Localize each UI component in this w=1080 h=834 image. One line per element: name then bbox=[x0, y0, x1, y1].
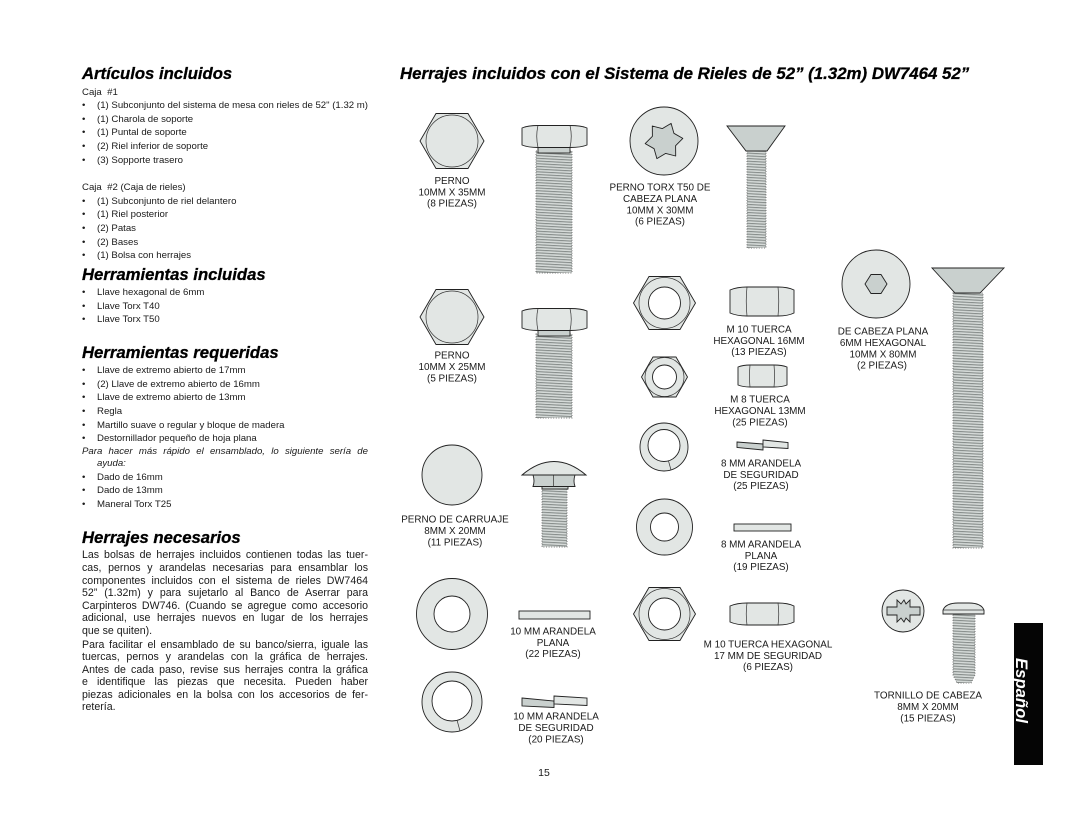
list: cajas: (2) Riel inferior de soporte bbox=[97, 141, 208, 152]
label: 10 MM ARANDELA bbox=[510, 626, 596, 638]
flat head hex socket bolt bbox=[838, 250, 1004, 548]
label: (6 PIEZAS) bbox=[635, 217, 685, 228]
heading: herramientas incluidas: Herramientas incluidas bbox=[82, 265, 266, 284]
nut m10 16mm bbox=[634, 276, 805, 358]
carriage bolt bbox=[401, 445, 586, 548]
flat washer 8mm bbox=[636, 499, 801, 573]
icon: torx head front bbox=[630, 107, 698, 175]
heading: herrajes necesarios: Herrajes necesarios bbox=[82, 528, 241, 547]
panel: artículos incluidos bbox=[81, 64, 368, 261]
label: PERNO bbox=[434, 176, 470, 187]
icon: bolt side bbox=[522, 308, 587, 418]
paragraph 2: Para facilitar el ensamblado de su banco/sierra, iguale las bbox=[82, 638, 368, 650]
panel: herrajes necesarios bbox=[82, 528, 368, 713]
label: DE CABEZA PLANA bbox=[838, 326, 929, 338]
icon: flat washer front bbox=[636, 499, 692, 555]
list: cajas: (1) Subconjunto del sistema de mesa con rieles de 52" (1.32 m) bbox=[97, 100, 368, 111]
paragraph 2: e identifique las piezas que necesita. Pueden haber bbox=[82, 676, 368, 688]
label: (15 PIEZAS) bbox=[900, 714, 956, 724]
paragraph 1: 52” (1.32m) y para sujetarlo al Banco de Aserrar para bbox=[82, 587, 368, 599]
label: PERNO bbox=[434, 350, 470, 362]
list: cajas: (1) Subconjunto de riel delantero bbox=[97, 196, 236, 207]
label: PERNO DE CARRUAJE bbox=[401, 514, 509, 526]
label: (6 PIEZAS) bbox=[743, 662, 793, 673]
icon: hex head front bbox=[420, 290, 484, 344]
icon: lock washer front bbox=[422, 672, 482, 732]
list: cajas: (2) Patas bbox=[97, 223, 136, 234]
label: CABEZA PLANA bbox=[623, 194, 697, 205]
icon: nut side bbox=[738, 365, 787, 387]
label: PLANA bbox=[537, 638, 570, 649]
nut m8 13mm bbox=[642, 357, 806, 428]
label: M 10 TUERCA HEXAGONAL bbox=[704, 640, 833, 650]
note: ensamblado más rápido: ayuda: bbox=[97, 458, 126, 469]
icon: hex socket front bbox=[842, 250, 910, 318]
icon: nut front bbox=[642, 357, 688, 397]
paragraph 1: Las bolsas de herrajes incluidos contienen todas las tuer- bbox=[82, 549, 368, 561]
label: 8MM X 20MM bbox=[897, 702, 959, 713]
icon: flat washer side bbox=[734, 524, 791, 531]
bolt 10mm x 35mm bbox=[419, 114, 587, 273]
icon: bolt side bbox=[522, 126, 587, 273]
panel: herramientas requeridas bbox=[82, 343, 368, 510]
label: 10MM X 30MM bbox=[627, 205, 693, 216]
label: 8 MM ARANDELA bbox=[721, 540, 801, 550]
list: herramientas requeridas: Martillo suave o regular y bloque de madera bbox=[97, 420, 284, 431]
list: cajas: (2) Bases bbox=[97, 237, 138, 248]
list: herramientas requeridas: Llave de extremo abierto de 13mm bbox=[97, 392, 246, 403]
tab label: Español bbox=[1012, 658, 1031, 723]
list: cajas: Caja #2 (Caja de rieles) bbox=[82, 182, 186, 193]
list: cajas bbox=[82, 86, 368, 261]
label: (13 PIEZAS) bbox=[731, 347, 787, 358]
panel: herramientas incluidas bbox=[82, 265, 266, 325]
label: DE SEGURIDAD bbox=[518, 723, 594, 734]
list: herramientas incluidas bbox=[82, 287, 204, 325]
list: dados: Dado de 13mm bbox=[97, 485, 163, 496]
label: (25 PIEZAS) bbox=[733, 481, 789, 492]
label: 17 MM DE SEGURIDAD bbox=[714, 651, 822, 662]
icon: carriage bolt side bbox=[522, 462, 586, 547]
icon: hex head front bbox=[420, 114, 484, 168]
label: 10MM X 25MM bbox=[419, 362, 485, 373]
label: 6MM HEXAGONAL bbox=[840, 338, 927, 349]
label: M 8 TUERCA bbox=[730, 394, 790, 406]
paragraph 1: adicional, use herrajes nuevos en lugar de los herrajes bbox=[82, 612, 368, 624]
label: TORNILLO DE CABEZA bbox=[874, 690, 982, 702]
list: cajas: (3) Sopporte trasero bbox=[97, 155, 183, 166]
list: herramientas requeridas: Destornillador pequeño de hoja plana bbox=[97, 433, 257, 444]
list: herramientas incluidas: Llave Torx T40 bbox=[97, 301, 160, 312]
paragraph 1 bbox=[82, 549, 368, 637]
list: cajas: (1) Puntal de soporte bbox=[97, 127, 187, 138]
label: HEXAGONAL 16MM bbox=[713, 336, 805, 347]
paragraph 2 bbox=[82, 638, 368, 713]
icon: round head front bbox=[422, 445, 482, 505]
icon: flat head side bbox=[932, 268, 1004, 548]
icon: screw side bbox=[943, 603, 984, 683]
icon: flat washer side bbox=[519, 611, 590, 619]
icon: nut front bbox=[634, 588, 696, 640]
note: ensamblado más rápido bbox=[82, 446, 368, 469]
label: (2 PIEZAS) bbox=[857, 361, 907, 372]
paragraph 2: retería. bbox=[82, 701, 116, 713]
label: 10 MM ARANDELA bbox=[513, 712, 599, 722]
list: dados bbox=[82, 472, 172, 510]
page number: 15 bbox=[538, 767, 550, 779]
label: (20 PIEZAS) bbox=[528, 734, 584, 745]
list: herramientas requeridas: Regla bbox=[97, 406, 122, 417]
label: PERNO TORX T50 DE bbox=[610, 182, 711, 194]
label: 10MM X 80MM bbox=[850, 349, 916, 360]
icon: flat washer front bbox=[416, 578, 488, 650]
icon: screw head front bbox=[882, 590, 924, 632]
paragraph 2: tuercas, pernos y arandelas con la gráfica de herrajes. bbox=[82, 651, 368, 663]
paragraph 2: piezas adicionales en la bolsa con los accesorios de fer- bbox=[82, 689, 368, 701]
label: (25 PIEZAS) bbox=[732, 418, 788, 428]
label: DE SEGURIDAD bbox=[723, 470, 799, 481]
label: (11 PIEZAS) bbox=[428, 538, 482, 548]
list: herramientas requeridas: Llave de extremo abierto de 17mm bbox=[97, 365, 246, 376]
torx flat head bolt bbox=[610, 107, 785, 248]
label: (8 PIEZAS) bbox=[427, 199, 477, 210]
label: HEXAGONAL 13MM bbox=[714, 406, 806, 417]
language tab bbox=[1012, 623, 1043, 765]
label: (19 PIEZAS) bbox=[733, 562, 789, 573]
flat washer 10mm bbox=[416, 578, 596, 660]
list: dados: Dado de 16mm bbox=[97, 472, 163, 483]
label: (5 PIEZAS) bbox=[427, 374, 477, 384]
bolt 10mm x 25mm bbox=[419, 290, 587, 418]
list: cajas: Caja #1 bbox=[82, 86, 118, 98]
icon: flat head side bbox=[727, 126, 785, 248]
list: cajas: (1) Charola de soporte bbox=[97, 114, 193, 125]
heading: artículos incluidos: Artículos incluidos bbox=[82, 64, 232, 83]
label: M 10 TUERCA bbox=[726, 324, 792, 336]
icon: lock washer side bbox=[522, 696, 587, 708]
label: (22 PIEZAS) bbox=[525, 649, 581, 660]
list: herramientas requeridas bbox=[82, 365, 284, 444]
list: herramientas requeridas: (2) Llave de extremo abierto de 16mm bbox=[97, 379, 260, 390]
icon: nut side bbox=[730, 603, 794, 625]
list: cajas: (1) Bolsa con herrajes bbox=[97, 250, 191, 261]
paragraph 1: que se quiten). bbox=[82, 625, 152, 637]
lock nut m10 17mm bbox=[634, 588, 833, 673]
note: ensamblado más rápido: Para hacer más rápido el ensamblado, lo siguiente sería de bbox=[82, 446, 368, 457]
label: 8MM X 20MM bbox=[424, 526, 486, 537]
icon: nut side bbox=[730, 287, 794, 316]
icon: nut front bbox=[634, 276, 696, 330]
list: dados: Maneral Torx T25 bbox=[97, 499, 171, 510]
pan head screw bbox=[874, 590, 984, 724]
heading: herramientas requeridas: Herramientas requeridas bbox=[82, 343, 279, 362]
paragraph 1: componentes incluidos con el sistema de rieles DW7464 bbox=[82, 575, 368, 587]
paragraph 1: cas, pernos y arandelas necesarias para ensamblar los bbox=[82, 562, 368, 574]
icon: lock washer front bbox=[640, 423, 688, 471]
list: cajas: (1) Riel posterior bbox=[97, 209, 168, 220]
lock washer 10mm bbox=[422, 672, 599, 745]
label: PLANA bbox=[745, 551, 778, 562]
list: herramientas incluidas: Llave Torx T50 bbox=[97, 314, 160, 325]
label: 8 MM ARANDELA bbox=[721, 458, 801, 470]
icon: lock washer side bbox=[737, 440, 788, 450]
label: 10MM X 35MM bbox=[419, 187, 485, 198]
paragraph 1: Carpinteros DW746. (Cuando se agregue como accesorio bbox=[82, 600, 368, 612]
list: herramientas incluidas: Llave hexagonal de 6mm bbox=[97, 287, 204, 298]
title: Herrajes incluidos con el Sistema de Rieles de 52” (1.32m) DW7464 52” bbox=[400, 64, 969, 83]
lock washer 8mm bbox=[640, 423, 801, 492]
paragraph 2: Antes de cada paso, revise sus herrajes contra la gráfica bbox=[82, 664, 368, 676]
